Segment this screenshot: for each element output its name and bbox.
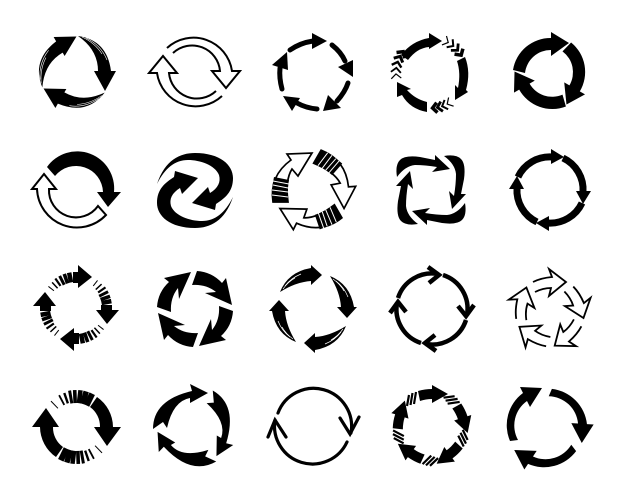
icon: three tapered arrows <box>150 384 252 484</box>
icon: three brush arrows <box>23 27 116 126</box>
icon: four chevron ring arrows <box>390 267 474 351</box>
icon: four arrows in rounded square <box>396 155 466 225</box>
icon: two interlocking swirl arrows <box>157 153 233 228</box>
icon: five outlined pentagon arrows <box>504 269 596 357</box>
icon: two arrows with radial dash tails <box>32 390 121 464</box>
icon: four brush stroke arrows <box>269 265 357 353</box>
icon: arrows with chevron tails <box>391 33 468 113</box>
icon: five striped pentagon arrows <box>384 385 476 475</box>
icon: two thin line arrows <box>268 388 359 464</box>
icon: black and outlined arrows <box>32 151 121 227</box>
icon: three thick arrows <box>505 32 604 126</box>
icon: three plain arrows <box>507 386 600 481</box>
icon: two outlined arrows <box>149 38 240 106</box>
icon: four ring arrows <box>509 149 591 231</box>
icon: four arrowheads with dash tails <box>33 265 119 351</box>
icon: outlined arrows with striped tails <box>272 149 364 243</box>
icon: five thin dashed arrows <box>272 33 353 111</box>
icon: four thick pinwheel arrows <box>157 271 233 347</box>
